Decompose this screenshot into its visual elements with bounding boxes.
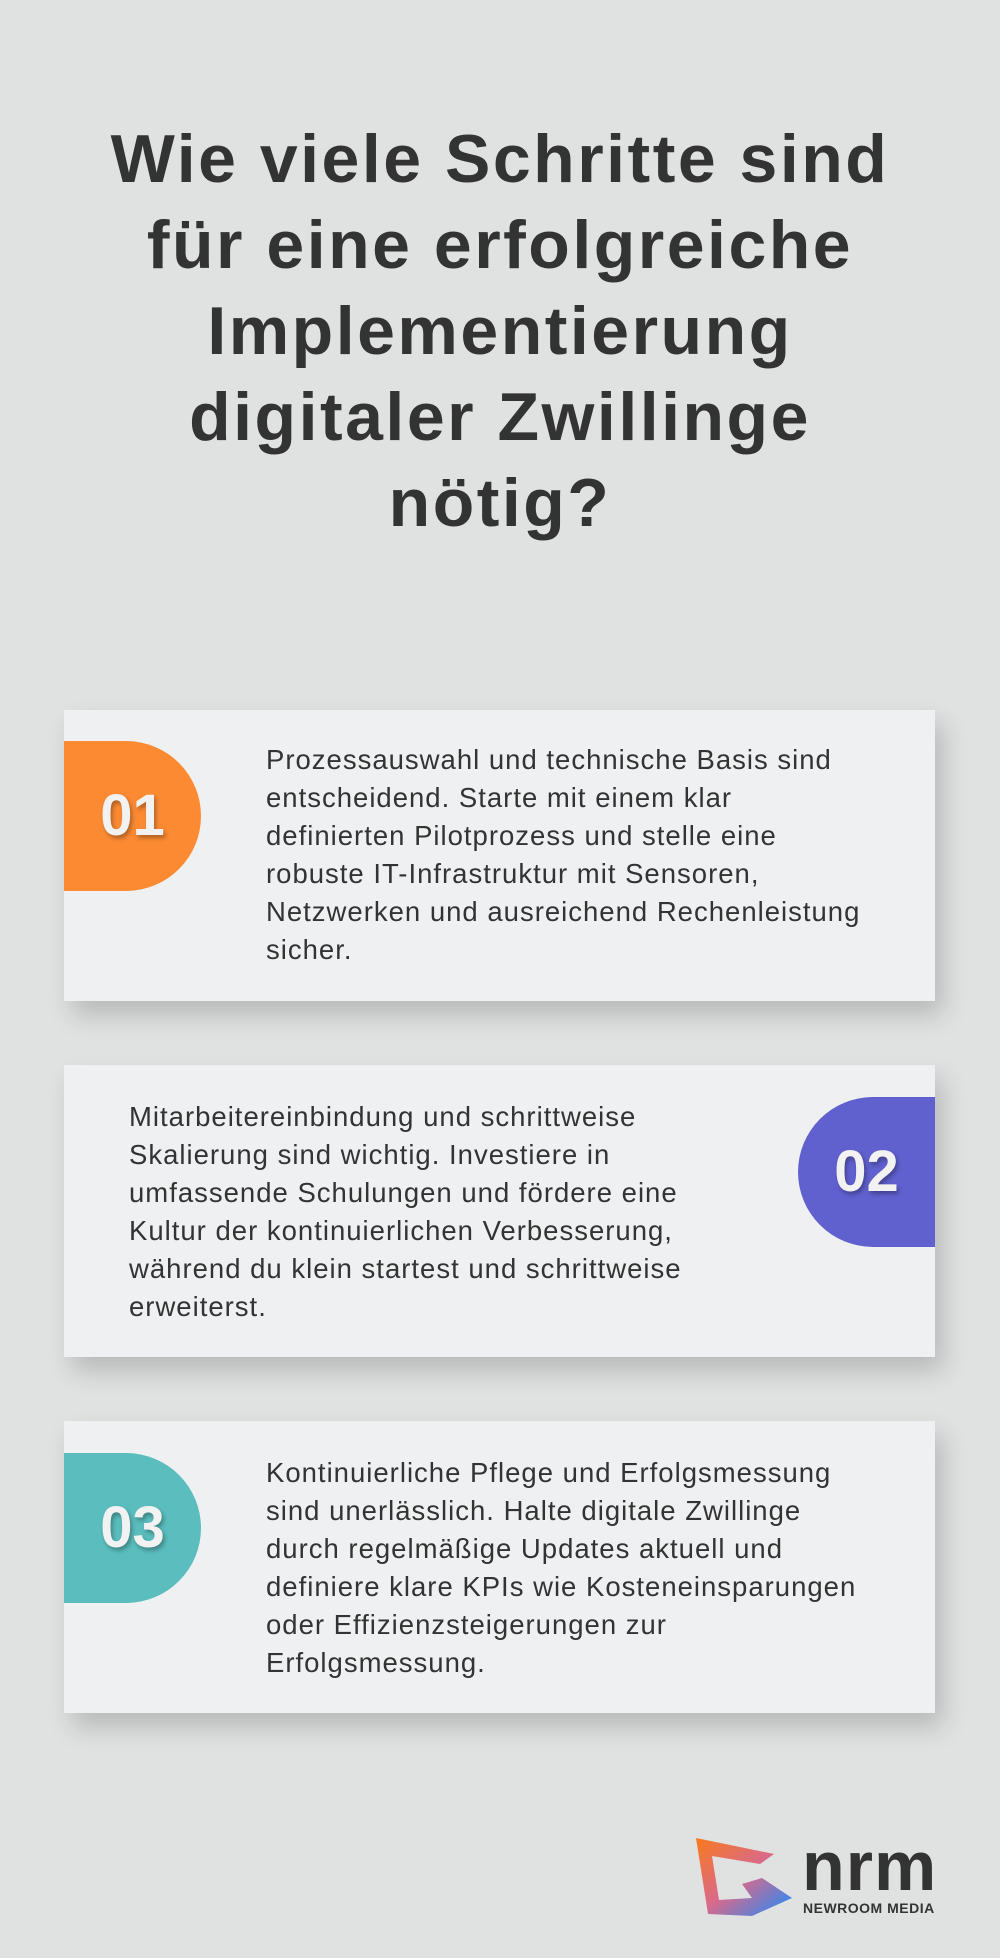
text 1: Prozessauswahl und technische Basis sind	[266, 744, 832, 775]
badge 03: 03	[100, 1495, 165, 1560]
text 3: durch regelmäßige Updates aktuell und	[266, 1533, 783, 1564]
logo	[696, 1827, 937, 1916]
text 1: Netzwerken und ausreichend Rechenleistung	[266, 896, 860, 927]
logo: NEWROOM MEDIA	[803, 1900, 935, 1916]
panel: step 1	[64, 710, 935, 1001]
icon: logo mark	[696, 1838, 792, 1916]
text 1: definierten Pilotprozess und stelle eine	[266, 820, 777, 851]
text 3: Kontinuierliche Pflege und Erfolgsmessung	[266, 1457, 831, 1488]
badge 02	[798, 1097, 935, 1247]
text 2: Mitarbeitereinbindung und schrittweise	[129, 1101, 636, 1132]
text 2: Kultur der kontinuierlichen Verbesserung,	[129, 1215, 673, 1246]
panel: step 3	[64, 1421, 935, 1713]
text 1	[266, 744, 860, 965]
title: für eine erfolgreiche	[147, 207, 853, 283]
title: nötig?	[389, 465, 611, 541]
badge 02: 02	[834, 1139, 899, 1204]
title	[110, 121, 889, 541]
logo text: nrm	[802, 1827, 937, 1905]
text 3: oder Effizienzsteigerungen zur	[266, 1609, 667, 1640]
badge 01: 01	[100, 783, 165, 848]
text 1: robuste IT-Infrastruktur mit Sensoren,	[266, 858, 759, 889]
badge 03	[64, 1453, 201, 1603]
title: digitaler Zwillinge	[189, 379, 811, 455]
text 3	[266, 1457, 856, 1678]
title: Wie viele Schritte sind	[111, 121, 889, 197]
text 1: sicher.	[266, 934, 352, 965]
text 1: entscheidend. Starte mit einem klar	[266, 782, 732, 813]
panel: step 2	[64, 1065, 935, 1357]
text 3: Erfolgsmessung.	[266, 1647, 486, 1678]
text 2: umfassende Schulungen und fördere eine	[129, 1177, 678, 1208]
text 2: während du klein startest und schrittweise	[129, 1253, 682, 1284]
text 2: Skalierung sind wichtig. Investiere in	[129, 1139, 610, 1170]
text 3: sind unerlässlich. Halte digitale Zwillinge	[266, 1495, 801, 1526]
text 2	[129, 1101, 682, 1322]
text 3: definiere klare KPIs wie Kosteneinsparungen	[266, 1571, 856, 1602]
title: Implementierung	[207, 293, 793, 369]
badge 01	[64, 741, 201, 891]
text 2: erweiterst.	[129, 1291, 267, 1322]
